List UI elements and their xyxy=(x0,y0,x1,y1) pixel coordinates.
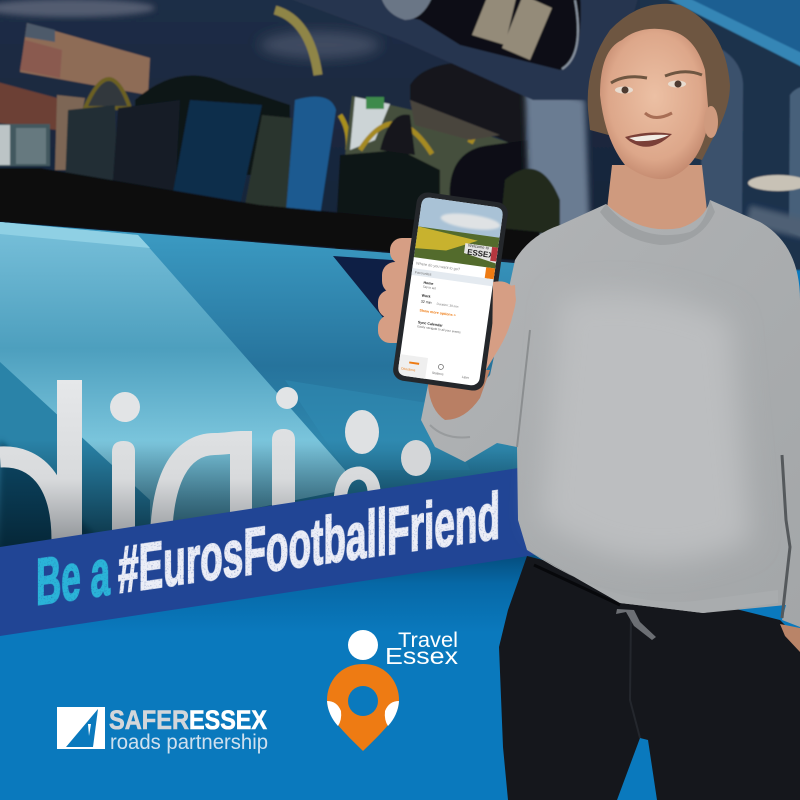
logo: Travel Essex xyxy=(327,629,459,751)
app favourites list xyxy=(404,268,494,338)
app bottom navigation: Later xyxy=(461,375,470,380)
right side window xyxy=(640,0,800,270)
reflected bright interior xyxy=(340,96,530,240)
head xyxy=(588,4,730,179)
app header photo: ESSEX xyxy=(467,247,495,260)
bus window with reflections xyxy=(0,0,800,270)
app search bar: Where do you want to go? xyxy=(416,261,460,272)
logo: Safer Essex Roads Partnership: ESSEX xyxy=(189,705,267,735)
logo: Travel Essex: Travel xyxy=(398,629,458,652)
bus body livery panels xyxy=(0,222,540,560)
mouth xyxy=(625,133,672,147)
nose xyxy=(645,113,672,118)
thumb over phone edge xyxy=(492,281,516,350)
logo: Travel Essex: Essex xyxy=(385,643,459,669)
app search bar xyxy=(412,257,495,279)
app favourites list: Sync Calendar xyxy=(418,320,443,328)
app favourites list: Easily navigate to all your events xyxy=(417,324,461,334)
wrist xyxy=(428,370,490,420)
upper frame xyxy=(267,0,640,100)
eyes xyxy=(615,86,633,94)
neck xyxy=(606,165,708,245)
app favourites list: 32 min xyxy=(421,299,432,305)
icon: road square xyxy=(57,707,105,749)
bright reflected sky on right xyxy=(525,82,590,240)
face xyxy=(600,29,709,179)
jumper highlights xyxy=(540,293,750,561)
man in grey jumper xyxy=(378,4,800,800)
campaign hashtag text xyxy=(36,479,500,620)
logo: Safer Essex Roads Partnership: roads partnership xyxy=(110,731,268,754)
logo: Safer Essex Roads Partnership xyxy=(57,705,268,754)
jumper xyxy=(421,200,800,627)
lower blue bus panel xyxy=(0,530,660,800)
reflected man and seats xyxy=(410,62,528,150)
app header photo: Welcome to xyxy=(468,243,490,251)
app bottom navigation: Directions xyxy=(401,366,416,372)
app favourites list: Home xyxy=(423,281,434,286)
app header photo xyxy=(414,197,504,271)
reflected house xyxy=(0,23,150,170)
bus lettering: digi logo xyxy=(0,380,431,570)
hand holding phone xyxy=(378,238,515,380)
eyebrows xyxy=(611,72,702,83)
app favourites list: Work xyxy=(421,294,431,299)
app bottom navigation xyxy=(397,354,472,385)
app favourites list: Favourites xyxy=(415,270,432,277)
app bottom navigation: Stations xyxy=(432,371,444,376)
campaign hashtag text: Be a xyxy=(36,536,111,620)
icon: orange map pin xyxy=(327,664,399,751)
app favourites list: Duration: 38 min xyxy=(436,302,459,309)
campaign hashtag text: #EurosFootballFriend xyxy=(118,479,500,608)
reflected trees and seats xyxy=(135,75,290,175)
dark trousers xyxy=(499,556,800,800)
black window ledge xyxy=(0,168,540,262)
ear xyxy=(704,106,718,138)
phone showing travel app xyxy=(392,191,509,392)
hand in pocket xyxy=(780,624,800,652)
logo: Safer Essex Roads Partnership: SAFER xyxy=(109,705,189,735)
hair xyxy=(588,4,730,160)
app favourites list: Show more options > xyxy=(419,308,456,317)
slanted campaign banner xyxy=(0,467,535,636)
app favourites list: Tap to set xyxy=(423,285,436,290)
